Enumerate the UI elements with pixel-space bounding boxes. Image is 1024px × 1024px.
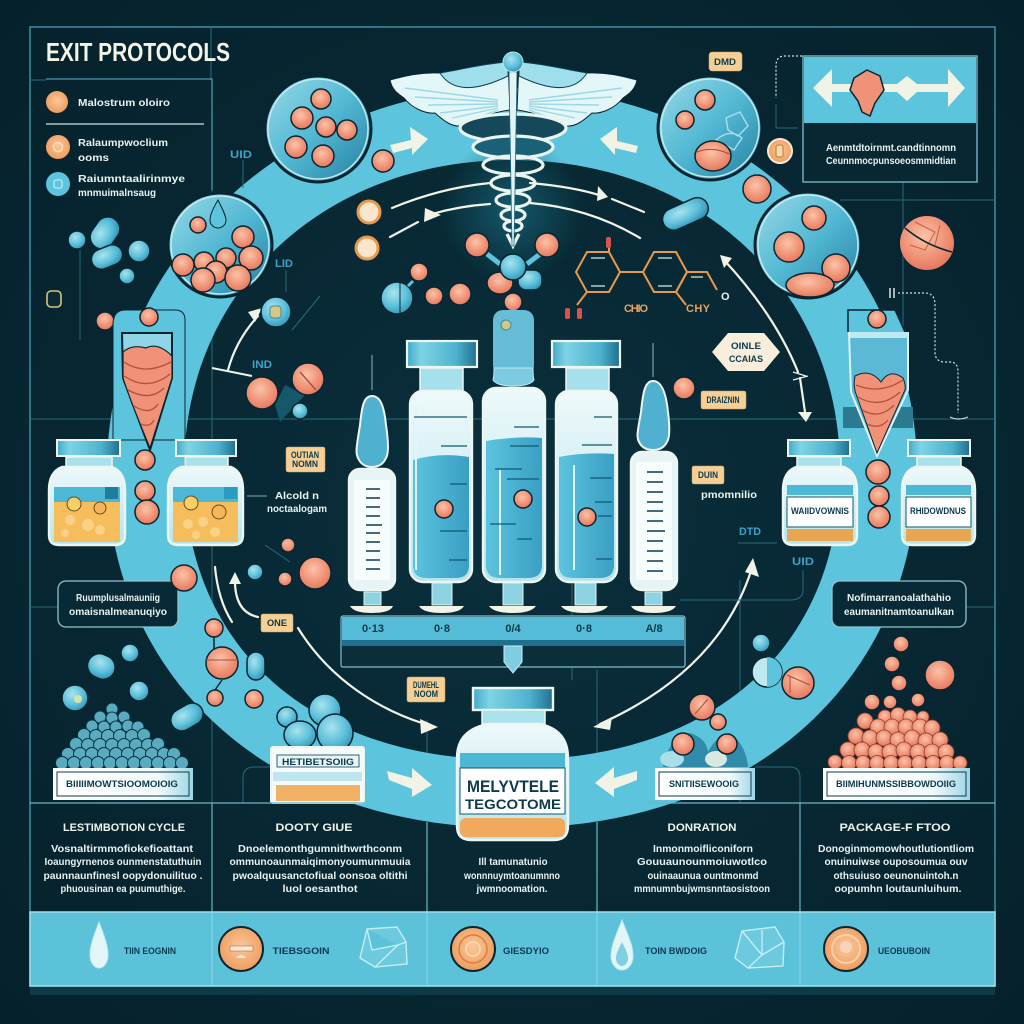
pile label: [823, 768, 970, 800]
syringe one: [349, 355, 395, 613]
callout: right: eaumanitnamtoanulkan: [844, 607, 954, 618]
column: lestimbotion cycle: [44, 822, 203, 895]
label: small tan box: OUTIAN: [291, 450, 319, 460]
scale values: A/8: [645, 623, 663, 635]
text: left jars caption: [247, 491, 327, 515]
blue pills upper left: [47, 212, 150, 340]
molecule on band lower right: [752, 634, 814, 699]
label: small tan box: NOMN: [292, 459, 318, 469]
pile: blue pills: [53, 644, 207, 800]
column: package ftoo: [818, 822, 974, 895]
column: dooty giue: luol oesanthot: [282, 884, 358, 895]
panel: top right: [803, 56, 977, 182]
labels: DTD and UID: DTD: [739, 526, 761, 538]
panel: bottom grid lines: [30, 803, 995, 912]
text: left jars caption: noctaalogam: [267, 504, 327, 515]
legend item one: [46, 91, 170, 113]
legend item three: mnmuimalnsaug: [78, 188, 156, 199]
scale values: [362, 623, 663, 635]
panel: bottom blue strip: [30, 912, 995, 995]
arrow: into vial left: [387, 768, 432, 797]
serpent coils: [460, 114, 566, 246]
scale values: 0·8: [434, 623, 450, 635]
molecule node cluster: [465, 233, 559, 311]
lens: right: [755, 192, 861, 298]
panel: top right: Ceunnmocpunsoeosmmidtian: [826, 156, 956, 167]
arrow: into vial right: [595, 767, 637, 797]
arrow: left long curve: [298, 628, 438, 734]
organ icon: [850, 70, 884, 116]
legend item two: [46, 135, 168, 164]
thin arrows around caduceus: [390, 183, 644, 238]
dots lower left of centre: [247, 538, 331, 589]
chemical structure: O: [721, 291, 730, 303]
dose scale bar: [341, 616, 685, 673]
column: lestimbotion cycle: paunnaunfinesl oopydonuilituo .: [44, 871, 203, 882]
icon: caduceus: [390, 52, 637, 282]
icon: orange disc three: [824, 927, 868, 971]
scale values: 0·13: [362, 623, 384, 635]
panel text: Aenmtdtoirnmt.candtinnomn: [826, 143, 956, 154]
label: small tan box: [286, 447, 325, 472]
legend item one: Malostrum oloiro: [78, 98, 170, 109]
strip label one: TIIN EOGNIN: [124, 946, 176, 956]
pointer: [504, 646, 522, 673]
strip label four: TOIN BWDOIG: [645, 946, 707, 956]
flask: left: [113, 308, 185, 524]
lens: left: [168, 193, 272, 297]
strip label three: GIESDYIO: [503, 946, 549, 956]
jar: right two: [902, 440, 975, 545]
column: centre: [463, 857, 560, 895]
column: package ftoo: Donoginmomowhoutlutiontliom: [818, 844, 974, 855]
label: DUIN with caption: pmomnilio: [701, 490, 757, 501]
vial four: [552, 341, 620, 613]
large salmon ball: [900, 216, 954, 270]
arrow: small left curve: [215, 567, 258, 622]
column: lestimbotion cycle: phuousinan ea puumuthige.: [60, 884, 186, 895]
label: DUIN with caption: [692, 466, 757, 501]
column: package ftoo: othsuiuso oeunonuintoh.n: [834, 871, 958, 882]
staff: [509, 72, 517, 246]
column: lestimbotion cycle: LESTIMBOTION CYCLE: [63, 822, 185, 834]
arrow: top left band: [372, 127, 428, 172]
scale values: 0/4: [505, 623, 522, 635]
callout: left: Ruumplusalmauniig: [76, 593, 160, 604]
label: hexagon note: OINLE: [731, 341, 761, 351]
column: lestimbotion cycle: Vosnaltirmmofiokefioattant: [51, 844, 194, 855]
chemical structure: CHY: [686, 303, 711, 315]
pile label: BIIIIIMOWTSIOOMOIOIG: [66, 779, 178, 789]
icon: orange disc two: [451, 927, 495, 971]
vial two: [407, 341, 477, 613]
label: tan box right: DRAIZNIN: [706, 395, 740, 405]
column: donration: ouinaaunua ountmonmd: [648, 871, 758, 882]
jar: right two: RHIDOWDNUS: [910, 506, 966, 516]
vial label: [465, 777, 561, 812]
main vial: bottom centre: [457, 688, 568, 840]
column: dooty giue: ommunoaunmaiqimonyoumunmuuia: [230, 857, 411, 868]
column: package ftoo: PACKAGE-F FTOO: [840, 822, 951, 834]
icon: drop one: [90, 922, 108, 968]
syringe five: [631, 343, 677, 613]
vial label: MELYVTELE: [467, 777, 559, 796]
column: donration: mmnumnbujwmsnntaosistoon: [634, 884, 770, 895]
pile label: BIIMIHUNMSSIBBOWDOIIG: [836, 779, 956, 789]
label: ONE: [261, 614, 293, 632]
column: centre: Ill tamunatunio: [478, 857, 548, 868]
jar: left two: [168, 440, 243, 545]
label: ONE: ONE: [267, 618, 287, 628]
arrow: upper left curve: [212, 296, 320, 376]
column: donration: Gouuaunounmoiuwotlco: [637, 857, 767, 868]
icon: crystal one: [360, 927, 407, 967]
label: DMD: DMD: [714, 57, 737, 67]
double arrow: [813, 69, 965, 107]
right wing: [517, 62, 637, 126]
dots near top right: [743, 139, 792, 203]
panel: legend: [46, 79, 212, 199]
labels: DTD and UID: UID: [792, 556, 814, 568]
label: tan box lower centre: NOOM: [414, 689, 438, 699]
icon: orange disc one: [219, 927, 263, 971]
arrow: upper right: [720, 255, 812, 422]
jar: right one: WAIIDVOWNIS: [791, 506, 849, 516]
legend item two: ooms: [78, 153, 110, 164]
label: UID left: UID: [230, 149, 252, 161]
vial label: TEGCOTOME: [465, 796, 561, 812]
callout: left: [58, 581, 178, 627]
box: lower right with dots: SNITIISEWOOIG: [669, 779, 739, 789]
column: dooty giue: Dnoelemonthgumnithwrthconm: [238, 844, 402, 855]
column: donration: Inmonmoifliconiforn: [653, 844, 753, 855]
jar: left one: [49, 440, 125, 545]
dots left of centre: IND: [252, 359, 272, 371]
label: hexagon note: [712, 333, 780, 371]
lens: upper right: [658, 76, 762, 180]
column: lestimbotion cycle: Ioaungyrnenos ounmenstatuthuin: [44, 857, 202, 868]
scale values: 0·8: [576, 623, 592, 635]
label: DUIN with caption: DUIN: [698, 470, 718, 480]
legend item two: Ralaumpwoclium: [78, 138, 168, 149]
dot right of syringes: [673, 377, 695, 399]
label: tan box lower centre: [407, 677, 445, 702]
column: package ftoo: oopumhn loutaunluihum.: [834, 884, 962, 895]
dashed connector right: [890, 288, 968, 419]
blue capsule top right: [659, 194, 712, 234]
column: dooty giue: pwoalquusanctofiual oonsoa oltithi: [232, 871, 408, 882]
legend item three: [46, 172, 186, 199]
dots left of centre: [246, 359, 324, 422]
label: DMD: [709, 52, 742, 71]
chemical structure: CHIO: [624, 303, 648, 315]
icon: drop two: [611, 920, 633, 970]
dashed connector top right: [776, 56, 802, 128]
connector lines: [243, 160, 286, 292]
column: centre: wonnnuymtoanumnno: [463, 871, 560, 882]
pile: salmon pellets: [823, 636, 970, 800]
box: lower left with blue blobs: [271, 694, 364, 803]
strip label two: TIEBSGOIN: [272, 946, 330, 956]
title: EXIT PROTOCOLS: [46, 37, 230, 67]
box: lower right with dots: [655, 694, 755, 800]
callout: right: [832, 581, 966, 627]
dots near centre top: [356, 201, 471, 314]
column: centre: jwmnoomation.: [476, 884, 548, 895]
label: tan box right: [701, 391, 746, 409]
text: left jars caption: Alcold n: [275, 491, 319, 502]
flask: right: [843, 310, 913, 528]
legend item three: Raiumntaalirinmye: [78, 174, 186, 185]
lens: upper left: [265, 76, 371, 182]
strip label five: UEOBUBOIN: [878, 946, 930, 956]
arrow: right long curve: [593, 558, 759, 730]
callout: right: Nofimarranoalathahio: [847, 593, 951, 604]
label: hexagon note: CCAIAS: [729, 354, 763, 364]
label: tan box lower centre: DUMEHL: [413, 680, 439, 690]
column: donration: [634, 822, 770, 895]
left wing: [390, 62, 510, 126]
vial three: [483, 310, 545, 613]
jar: right one: [783, 440, 857, 545]
column: dooty giue: [230, 822, 411, 895]
pile label: [53, 768, 193, 800]
column: donration: DONRATION: [668, 822, 737, 834]
box: lower left with blue blobs: HETIBETSOIIG: [282, 757, 354, 767]
arrow: top right band: [600, 127, 638, 155]
column: dooty giue: DOOTY GIUE: [276, 822, 352, 834]
labels: DTD and UID: [680, 526, 814, 600]
chemical structure: [565, 237, 730, 319]
column: package ftoo: onuinuiwse ouposoumua ouv: [824, 857, 968, 868]
callout: left: omaisnalmeanuqiyo: [69, 607, 167, 618]
icon: crystal two: [735, 927, 784, 968]
molecule on band lower left: [205, 619, 265, 708]
label: LID: LID: [275, 258, 293, 270]
central ring band: [107, 88, 917, 828]
